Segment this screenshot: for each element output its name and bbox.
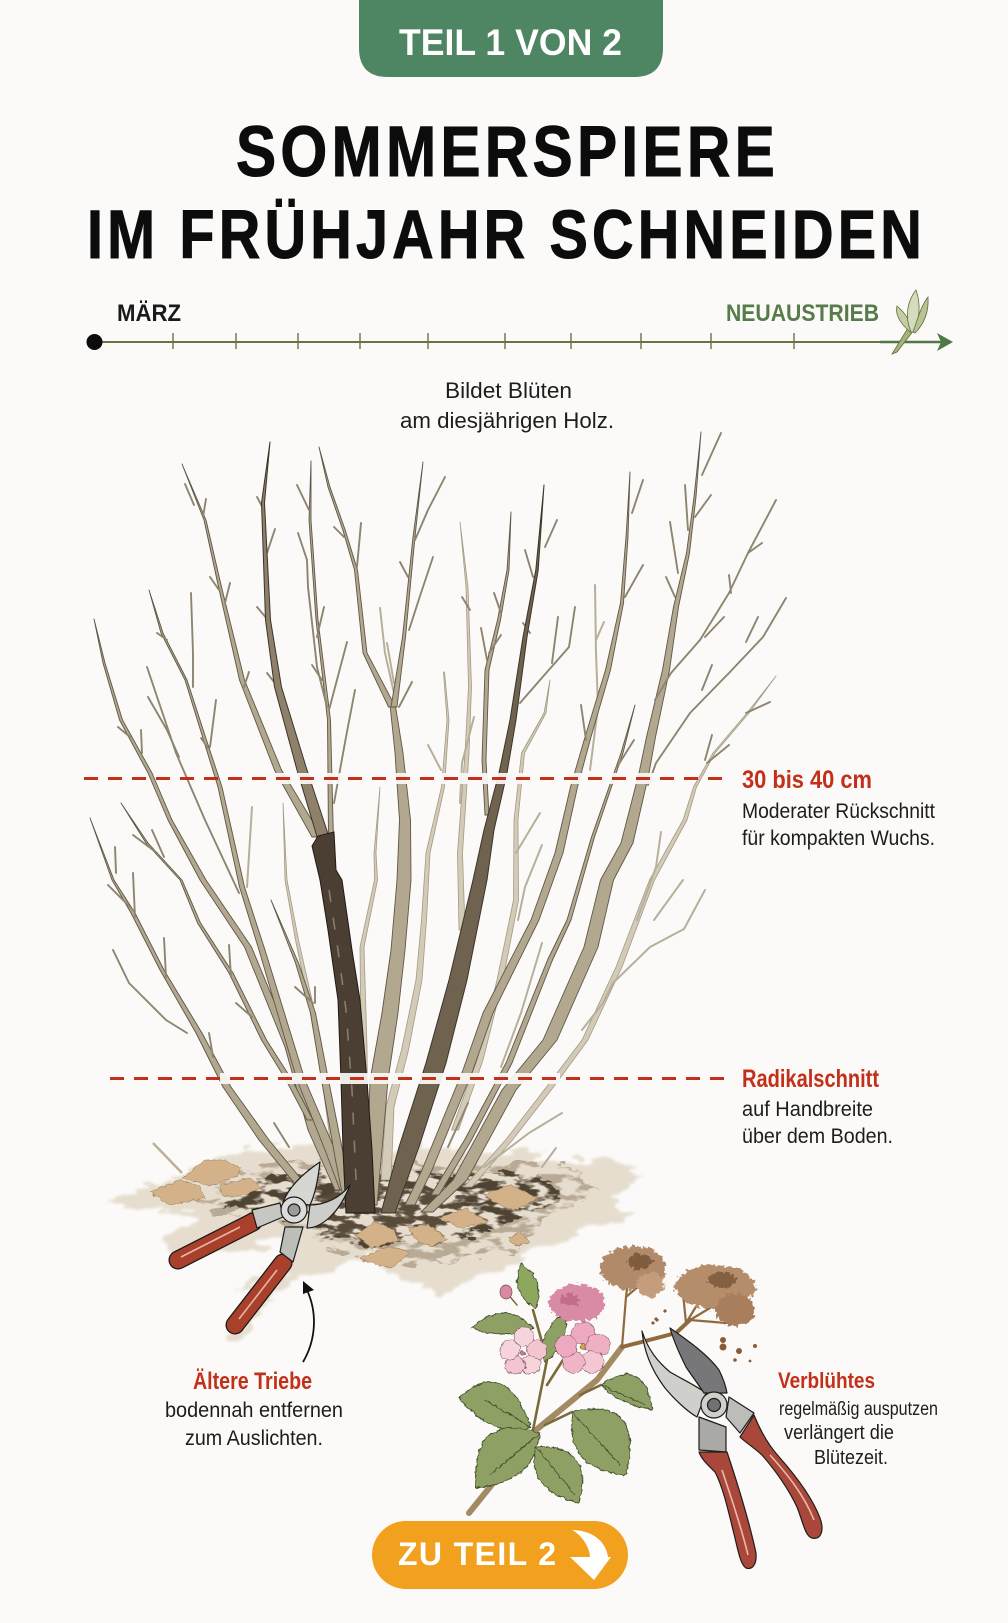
pale twigs — [247, 585, 705, 1167]
label: 30 bis 40 cm: für kompakten Wuchs. — [742, 827, 935, 850]
shrub: bare branches — [90, 432, 786, 1213]
label: Radikalschnitt — [742, 1065, 893, 1148]
label: Verblühtes — [778, 1368, 938, 1469]
label: 30 bis 40 cm — [742, 766, 935, 850]
cut line: 30 bis 40 cm — [84, 773, 725, 784]
arrow to old shoots — [303, 1281, 314, 1362]
intro text — [400, 378, 614, 433]
cut line: Radikalschnitt — [110, 1073, 725, 1084]
label: Verblühtes: regelmäßig ausputzen — [779, 1399, 938, 1420]
darker branches — [262, 442, 544, 1213]
header tab: Teil 1 von 2 — [359, 0, 663, 77]
header tab: Teil 1 von 2: TEIL 1 VON 2 — [399, 22, 622, 63]
label: Ältere Triebe — [165, 1368, 343, 1450]
label: Verblühtes: verlängert die — [784, 1422, 894, 1444]
medium branches — [90, 432, 701, 1212]
label: Verblühtes: Verblühtes — [778, 1368, 875, 1393]
timeline — [86, 300, 953, 351]
pale young shoots — [283, 522, 776, 1187]
label: 30 bis 40 cm: 30 bis 40 cm — [742, 766, 872, 794]
label: 30 bis 40 cm: Moderater Rückschnitt — [742, 800, 935, 823]
label: Ältere Triebe: zum Auslichten. — [185, 1427, 323, 1450]
pink flower cluster — [549, 1284, 605, 1322]
flower branch — [459, 1246, 757, 1513]
bud — [500, 1285, 512, 1299]
button: Zu Teil 2 — [372, 1521, 628, 1589]
title: SOMMERSPIERE — [236, 113, 779, 192]
stems — [469, 1280, 726, 1513]
label: Radikalschnitt: Radikalschnitt — [742, 1065, 880, 1093]
icon: curved down arrow — [570, 1530, 611, 1580]
pale blossom left — [500, 1327, 547, 1374]
label: Verblühtes: Blütezeit. — [814, 1447, 888, 1469]
fallen leaves — [150, 1160, 538, 1268]
label: Radikalschnitt: über dem Boden. — [742, 1125, 893, 1148]
intro text: Bildet Blüten — [445, 378, 572, 403]
timeline: NEUAUSTRIEB — [726, 300, 879, 327]
leaves — [459, 1264, 652, 1503]
icon: new shoot bud — [892, 290, 928, 354]
label: Ältere Triebe: Ältere Triebe — [193, 1368, 312, 1395]
timeline: MÄRZ — [117, 300, 181, 327]
label: Ältere Triebe: bodennah entfernen — [165, 1399, 343, 1422]
button: Zu Teil 2: ZU TEIL 2 — [398, 1536, 556, 1572]
thin side twigs — [108, 433, 786, 1147]
soil and fallen leaves — [100, 1143, 645, 1337]
icon: large pruning shears — [642, 1328, 822, 1568]
withered flower heads — [600, 1246, 757, 1362]
title — [87, 113, 926, 273]
intro text: am diesjährigen Holz. — [400, 408, 614, 433]
pink blossom right — [555, 1322, 610, 1373]
icon: bypass pruner on soil — [178, 1162, 350, 1325]
label: Radikalschnitt: auf Handbreite — [742, 1098, 873, 1121]
old dark main trunk — [312, 832, 375, 1213]
